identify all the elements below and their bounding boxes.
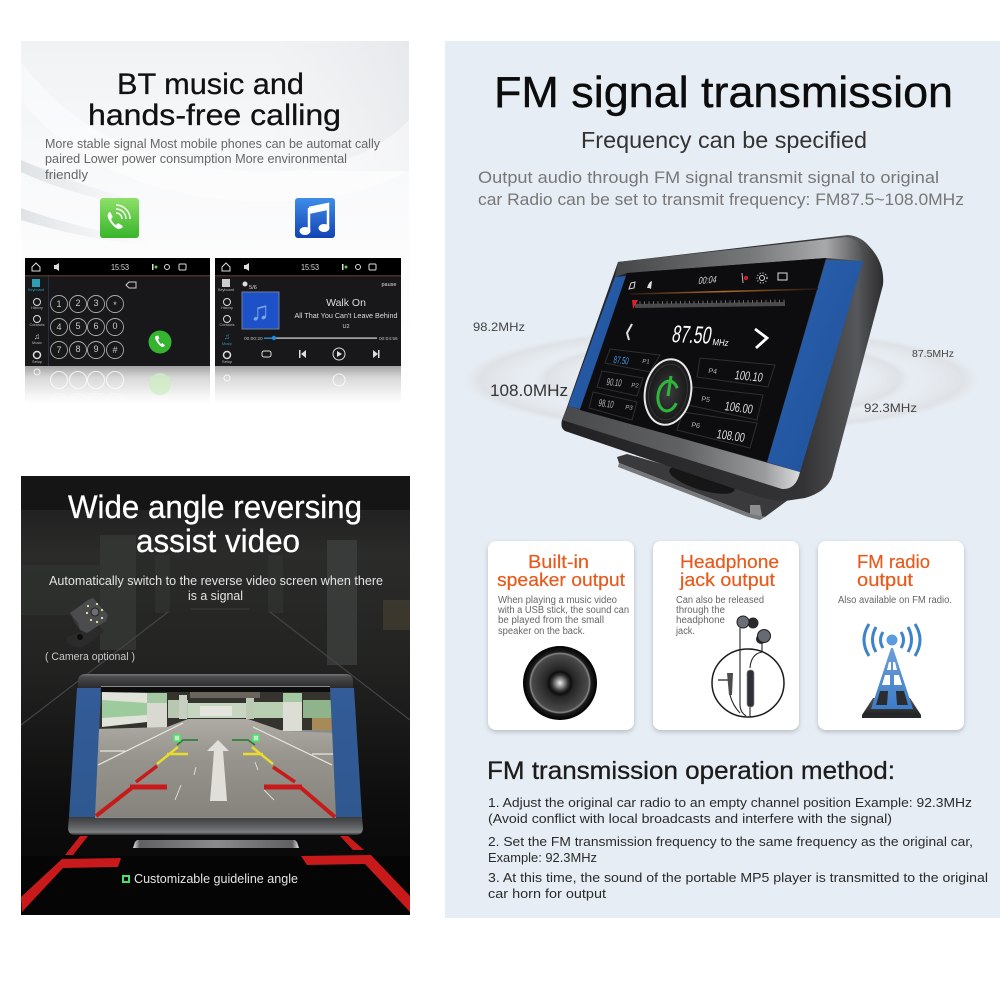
frequency readout: 87.50: [670, 321, 714, 349]
card heading: output: [857, 570, 913, 590]
device: monitor with reversing camera view: [68, 674, 363, 848]
album art: [242, 292, 279, 329]
screen: phone keypad: 1: [56, 299, 62, 309]
text block: bluetooth description: paired Lower power consumption More environmental: [45, 152, 347, 166]
progress bar: 00:00:20: [244, 336, 263, 342]
card heading: [679, 552, 779, 590]
heading: FM signal transmission: FM signal transmission: [494, 68, 953, 117]
frequency labels: [473, 320, 954, 415]
card text: Also available on FM radio.: [838, 595, 952, 606]
playback controls: [262, 348, 380, 360]
heading: wide angle reversing: assist video: [136, 523, 300, 559]
track info: 5/6: [249, 285, 257, 291]
screen: phone keypad: *: [113, 300, 117, 310]
device: FM radio player: P5: [701, 395, 711, 404]
frequency readout: MHz: [712, 337, 730, 348]
legend: customizable guideline angle: Customizable guideline angle: [134, 872, 298, 886]
status bar: [222, 263, 376, 272]
sidebar menu: Keyboard: [28, 288, 44, 292]
track info: pause: [382, 282, 396, 288]
track info: U2: [342, 324, 350, 330]
sidebar menu: Setup: [32, 360, 42, 364]
text block: FM description: Output audio through FM signal transmit signal to original: [478, 168, 939, 187]
screen: phone keypad: 9: [93, 344, 99, 354]
device: FM radio player: P1: [642, 359, 651, 366]
device: FM radio player: P2: [631, 383, 640, 390]
heading: wide angle reversing: [68, 494, 360, 552]
text block: operation steps: car horn for output: [488, 887, 607, 901]
text block: operation steps: (Avoid conflict with local broadcasts and interfere with the signal): [488, 812, 892, 826]
tuning ruler: [632, 300, 785, 309]
track info: Walk On: [326, 297, 366, 309]
screen: phone keypad: [25, 258, 210, 366]
icon: radio tower: [862, 624, 921, 718]
card heading: [497, 552, 625, 590]
sidebar menu: Music: [32, 341, 42, 345]
card text: headphone: [676, 615, 725, 626]
screen reflections: [25, 366, 401, 396]
red guideline extensions: [21, 836, 410, 912]
screen: phone keypad: 8: [75, 344, 81, 354]
device: FM radio player: 108.00: [715, 427, 746, 445]
device: FM radio player: 87.50: [612, 355, 630, 367]
card heading: [857, 552, 930, 590]
text block: FM description: car Radio can be set to transmit frequency: FM87.5~108.0MHz: [478, 190, 964, 209]
device: FM radio player: [561, 235, 883, 520]
sidebar menu: Music: [222, 342, 232, 346]
screen: phone keypad: 2: [75, 298, 81, 308]
sidebar menu: [218, 279, 235, 364]
track info: [249, 282, 398, 330]
heading: FM transmission operation method: FM transmission operation method:: [487, 757, 895, 785]
subheading: frequency can be specified: Frequency can be specified: [581, 127, 867, 153]
text block: bluetooth description: More stable signal Most mobile phones can be automat cally: [45, 137, 381, 151]
screen: phone keypad: 0: [112, 321, 118, 331]
card heading: speaker output: [497, 570, 625, 590]
parking guide lines: [96, 735, 335, 817]
card heading: Built-in: [528, 552, 589, 572]
signal rings: [465, 327, 979, 433]
screen: phone keypad: 4: [56, 322, 62, 332]
frequency labels: 87.5MHz: [912, 348, 954, 360]
panel: BT music and hands-free calling: [21, 41, 409, 410]
keypad: [50, 296, 124, 358]
card text: through the: [676, 605, 725, 616]
card: built-in speaker output: [488, 541, 634, 730]
sidebar menu: History: [31, 306, 43, 310]
card heading: Headphone: [680, 552, 779, 572]
screen: phone keypad: 5: [75, 321, 81, 331]
frequency labels: 98.2MHz: [473, 320, 525, 334]
frequency readout: [627, 321, 767, 349]
card heading: FM radio: [857, 552, 930, 572]
heading: BT music and hands-free calling: BT music and: [117, 68, 304, 101]
icon: reversing camera: [67, 598, 108, 647]
card: headphone jack output: [653, 541, 799, 730]
call button: [148, 330, 172, 354]
text block: operation steps: 2. Set the FM transmission frequency to the same frequency as the original car,: [488, 835, 973, 849]
text block: operation steps: 3. At this time, the sound of the portable MP5 player is transmitted to the original: [488, 871, 988, 885]
sidebar menu: History: [221, 306, 233, 310]
icon: earphones: [712, 616, 784, 717]
parking garage background: [21, 476, 410, 915]
sidebar menu: Contacts: [220, 323, 235, 327]
track info: All That You Can't Leave Behind: [294, 313, 398, 320]
device: FM radio player: 98.10: [597, 398, 615, 411]
sidebar menu: Keyboard: [218, 288, 234, 292]
text block: operation steps: Example: 92.3MHz: [488, 851, 597, 865]
sidebar menu: ♫: [34, 332, 40, 341]
text block: reverse description: is a signal: [188, 589, 243, 603]
card text: with a USB stick, the sound can: [497, 605, 629, 616]
card text: Can also be released: [676, 595, 764, 606]
progress bar: [244, 336, 398, 340]
delete key: [126, 282, 136, 288]
text block: FM description: [478, 168, 964, 209]
status icons: [629, 273, 787, 289]
card text: jack.: [675, 626, 695, 637]
label: camera optional: ( Camera optional ): [45, 651, 135, 663]
icon: blue music note: [295, 198, 335, 238]
device: FM radio player: P6: [691, 421, 701, 430]
power button: [640, 356, 696, 428]
screen: phone keypad: 6: [93, 321, 99, 331]
card text: When playing a music video: [498, 595, 617, 606]
text block: reverse description: [49, 574, 383, 603]
album art: ♫: [250, 296, 270, 326]
heading: wide angle reversing: Wide angle reversing: [68, 489, 362, 525]
screen: music player: [215, 258, 401, 366]
heading: BT music and hands-free calling: hands-free calling: [88, 99, 341, 132]
text block: bluetooth description: [45, 137, 381, 182]
device: FM radio player: 100.10: [733, 368, 764, 385]
card text: [675, 595, 764, 637]
progress bar: 00:04:56: [379, 336, 398, 342]
camera view: [95, 686, 336, 817]
sidebar menu: ♫: [224, 332, 230, 341]
device: FM radio player: P3: [625, 404, 634, 412]
screen: phone keypad: 7: [56, 345, 62, 355]
status icons: 00:04: [697, 275, 718, 287]
panel: FM signal transmission: [445, 41, 1000, 918]
icon: loudspeaker: [523, 646, 597, 720]
status bar: 15:53: [111, 263, 129, 272]
heading: BT music and hands-free calling: [88, 68, 341, 132]
card text: speaker on the back.: [498, 626, 585, 637]
device: FM radio player: P4: [708, 367, 718, 376]
arrow: [207, 740, 229, 801]
status bar: 15:53: [301, 263, 319, 272]
status bar: [32, 263, 186, 272]
card text: [497, 595, 629, 637]
device: FM radio player: 90.10: [605, 377, 623, 389]
card text: be played from the small: [498, 615, 604, 626]
preset frequency buttons: [589, 349, 775, 448]
sidebar menu: [28, 279, 45, 364]
text block: operation steps: [488, 796, 988, 901]
card heading: jack output: [679, 570, 775, 590]
text block: operation steps: 1. Adjust the original car radio to an empty channel position Example: 92.3MHz: [488, 796, 972, 810]
screen: phone keypad: #: [112, 345, 118, 355]
icon: green phone: [100, 198, 139, 238]
text block: bluetooth description: friendly: [45, 168, 89, 182]
panel: wide angle reversing assist video: [21, 476, 410, 915]
frequency labels: 92.3MHz: [864, 401, 917, 415]
text block: reverse description: Automatically switch to the reverse video screen when there: [49, 574, 383, 588]
device: FM radio player: 106.00: [723, 399, 754, 417]
sidebar menu: Contacts: [30, 323, 45, 327]
frequency labels: 108.0MHz: [490, 381, 568, 400]
sidebar menu: Setup: [222, 360, 232, 364]
card: FM radio output: [818, 541, 964, 730]
screen: phone keypad: 3: [93, 298, 99, 308]
